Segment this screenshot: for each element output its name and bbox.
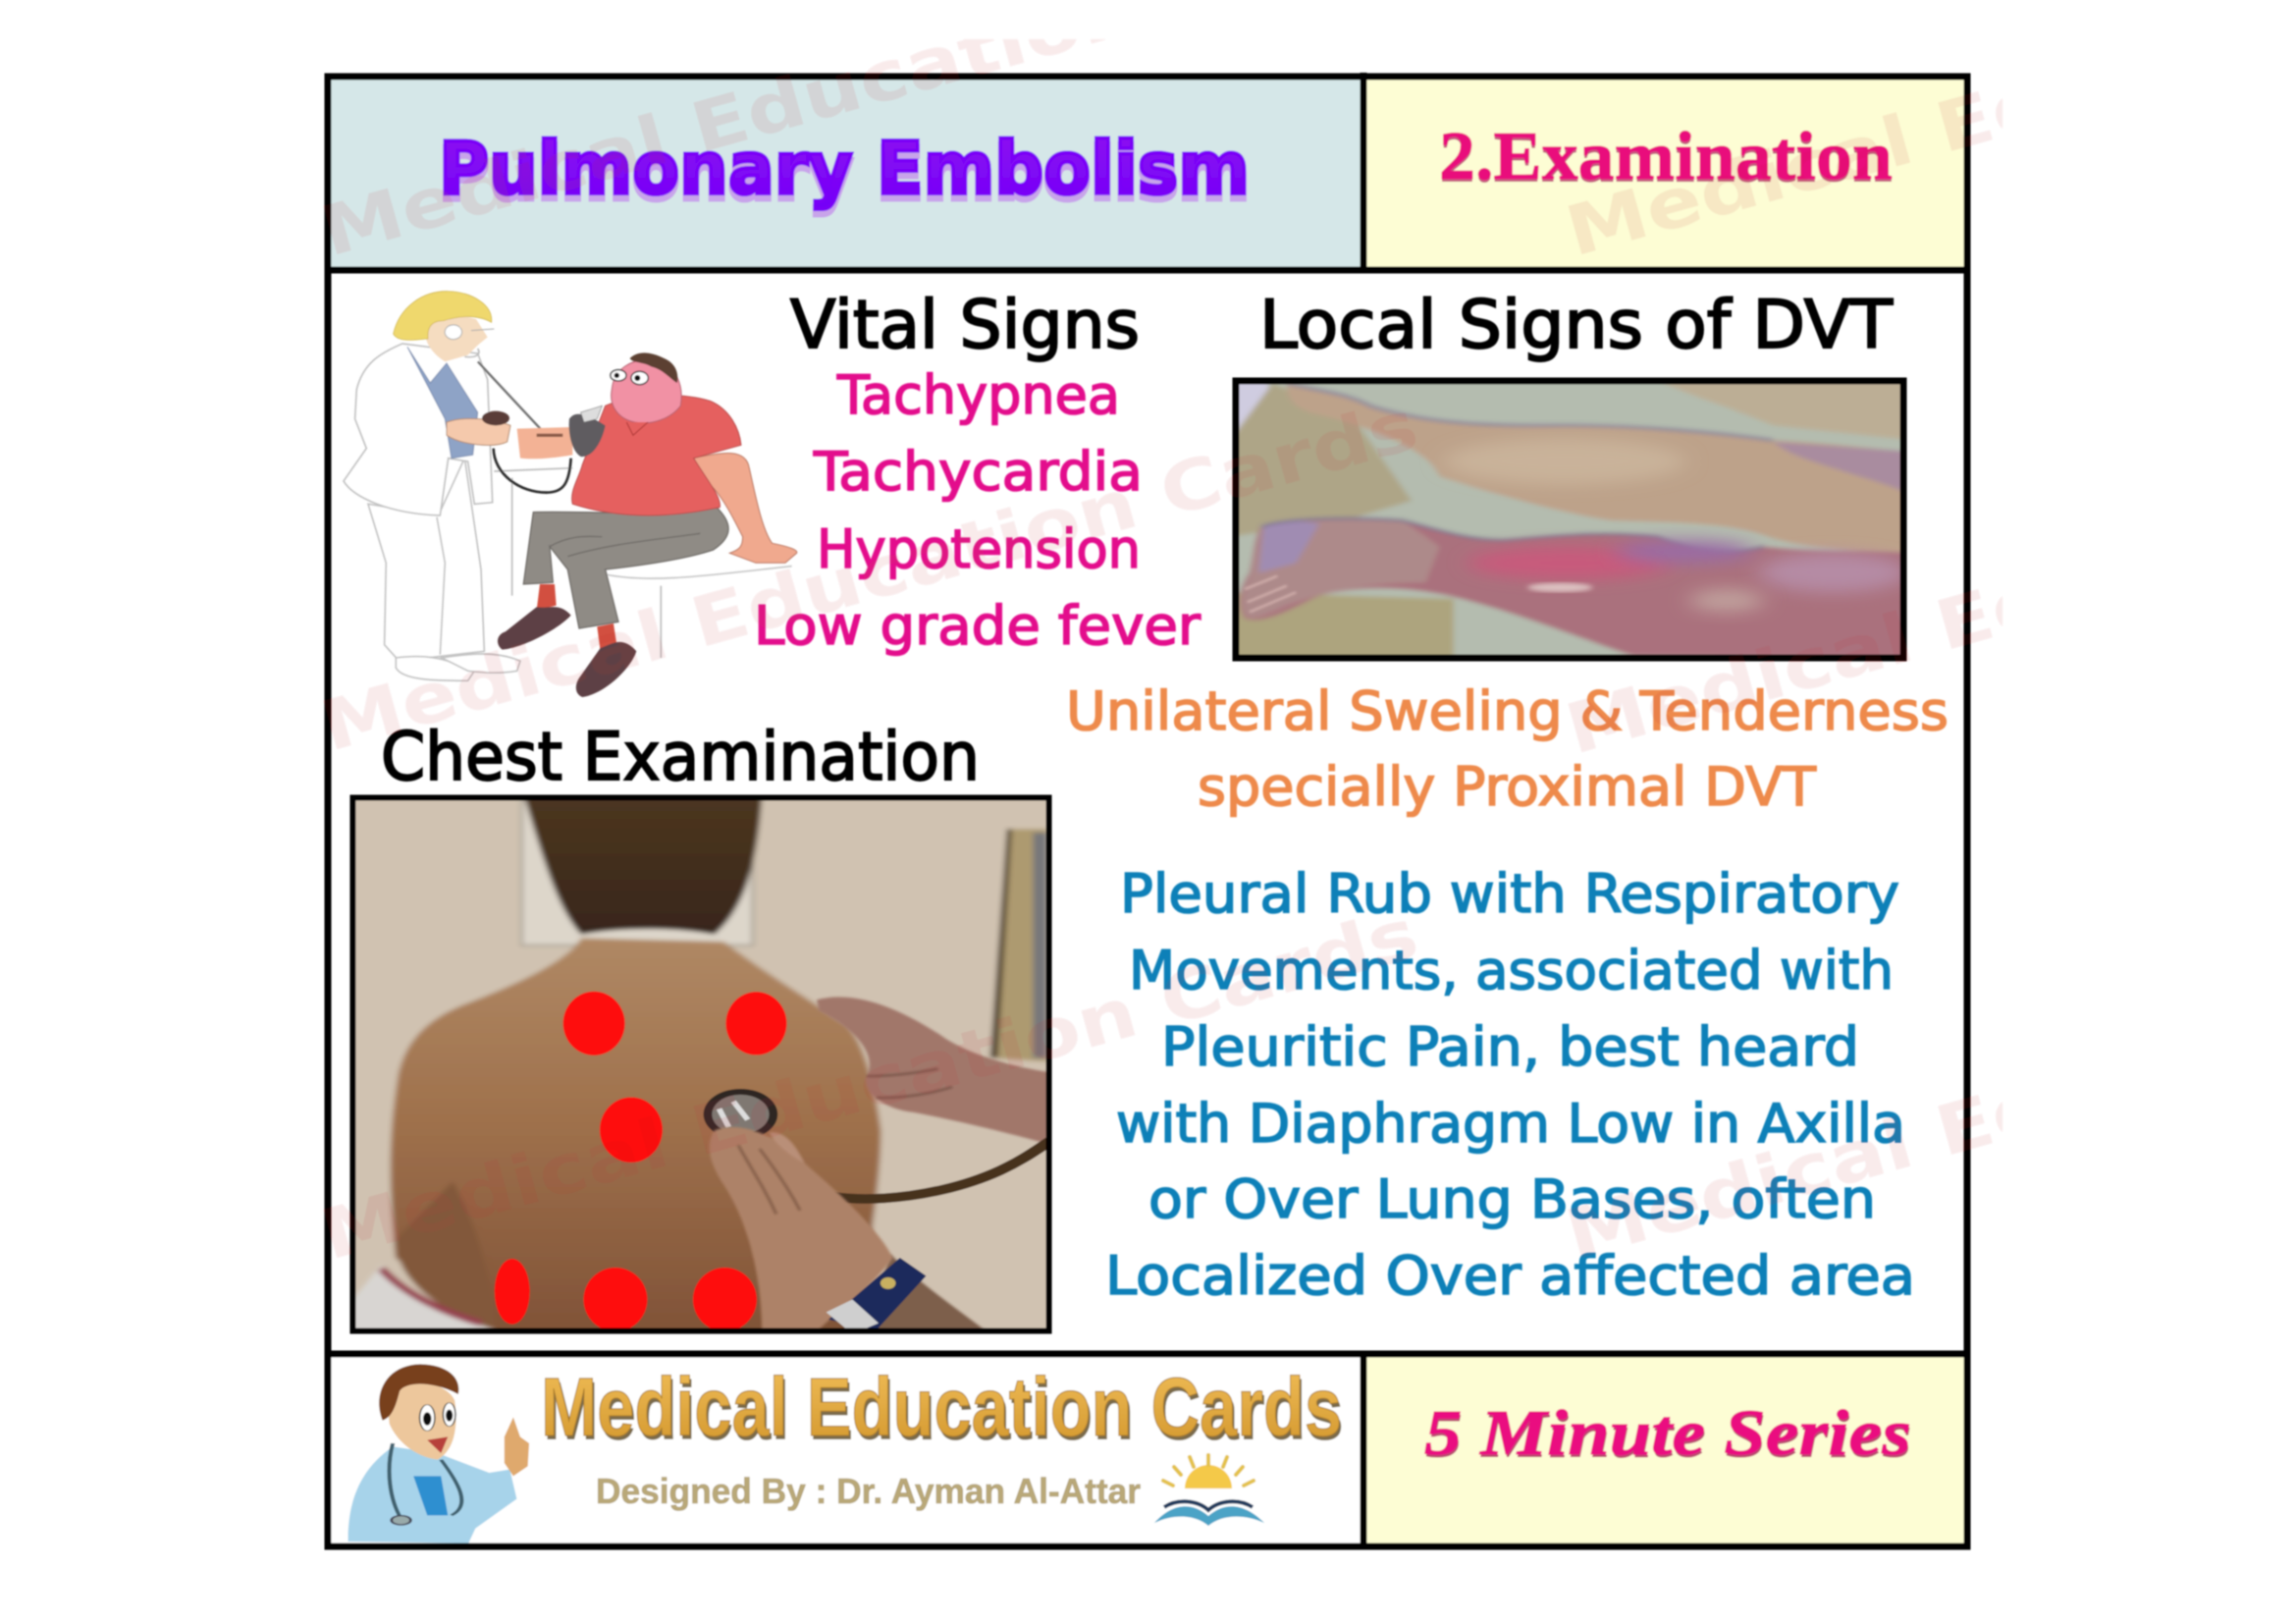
illustration: doctor measuring blood pressure of patient xyxy=(344,292,797,697)
doctor second hand on patient arm xyxy=(517,427,572,459)
wristwatch xyxy=(828,1258,926,1330)
text: pleural rub description: Localized Over affected area xyxy=(1105,1245,1915,1307)
doctor trousers and shoes xyxy=(368,459,484,661)
heading: Vital Signs: Vital Signs xyxy=(790,287,1140,364)
doctor hand and bulb xyxy=(447,418,510,445)
series label: 5 Minute Series: 5 Minute Series xyxy=(1425,1400,1912,1472)
text: pleural rub description: or Over Lung Bases, often xyxy=(1148,1168,1876,1230)
examiner upper hand xyxy=(817,997,1052,1145)
doctor coat xyxy=(344,344,493,515)
tube xyxy=(494,449,571,493)
stethoscope wire xyxy=(478,361,547,435)
text: DVT findings: specially Proximal DVT xyxy=(1198,756,1817,818)
watermark: Medical Education Cards xyxy=(313,0,2296,1275)
title: Pulmonary Embolism: Pulmonary Embolism xyxy=(439,133,1250,217)
title: Pulmonary Embolism: Pulmonary Embolism xyxy=(439,127,1250,211)
patient arm xyxy=(694,453,797,563)
brand name: Medical Education Cards: Medical Education Cards xyxy=(543,1365,1344,1457)
patient shirt xyxy=(572,396,741,515)
doctor face xyxy=(425,316,488,361)
series label: 5 Minute Series: 5 Minute Series xyxy=(1424,1397,1911,1469)
header panel: section label xyxy=(1363,78,1967,269)
blood pressure cuff xyxy=(569,414,606,457)
bench xyxy=(606,567,792,578)
list: vital signs: Low grade fever xyxy=(754,595,1201,657)
patient head xyxy=(612,360,681,423)
stethoscope head xyxy=(704,1089,777,1140)
text: pleural rub description xyxy=(1105,863,1915,1307)
examiner lower forearm xyxy=(878,1254,984,1329)
card frame and dividers xyxy=(328,73,1967,1546)
list: vital signs: Tachypnea xyxy=(836,364,1120,426)
footer panel: series label xyxy=(1363,1356,1967,1545)
infographic card xyxy=(323,39,2002,1551)
watermark: Medical Education Cards: Medical Education Cards xyxy=(313,893,1426,1275)
examiner lower hand xyxy=(710,1127,893,1334)
icon: cartoon doctor with thumbs up xyxy=(348,1364,529,1543)
doctor hair xyxy=(394,292,492,340)
list: vital signs: Hypotension xyxy=(817,518,1141,580)
footer panel: branding xyxy=(331,1356,1363,1545)
brand name: Medical Education Cards: Medical Education Cards xyxy=(541,1361,1342,1453)
icon: sun and open book logo xyxy=(1148,1455,1268,1526)
text: pleural rub description: with Diaphragm Low in Axilla xyxy=(1116,1093,1905,1155)
red auscultation points xyxy=(495,992,786,1331)
text: pleural rub description: Pleuritic Pain, best heard xyxy=(1161,1016,1859,1078)
photo: swollen leg with DVT xyxy=(1226,376,1912,661)
photo: chest auscultation with red points xyxy=(344,792,1057,1345)
stethoscope tube xyxy=(800,1140,1052,1199)
heading: Chest Examination: Chest Examination xyxy=(381,719,980,796)
patient socks and shoes xyxy=(537,584,557,611)
header panel: title xyxy=(328,78,1363,269)
watermark: Medical Education Cards: Medical Education Cards xyxy=(313,385,1426,767)
patient trousers xyxy=(523,508,728,628)
section heading: 2.Examination: 2.Examination xyxy=(1439,119,1893,194)
section heading: 2.Examination: 2.Examination xyxy=(1439,122,1893,197)
doctor shirt xyxy=(407,347,478,459)
list: vital signs: Tachycardia xyxy=(813,441,1143,503)
text: pleural rub description: Pleural Rub with Respiratory xyxy=(1120,863,1899,925)
list: vital signs xyxy=(754,364,1201,657)
text: pleural rub description: Movements, associated with xyxy=(1129,940,1894,1001)
heading: Local Signs of DVT: Local Signs of DVT xyxy=(1259,287,1893,364)
text: DVT findings xyxy=(1066,680,1949,818)
credit: designer name: Designed By : Dr. Ayman Al-Attar xyxy=(596,1471,1141,1511)
text: DVT findings: Unilateral Sweling & Tenderness xyxy=(1066,680,1949,742)
